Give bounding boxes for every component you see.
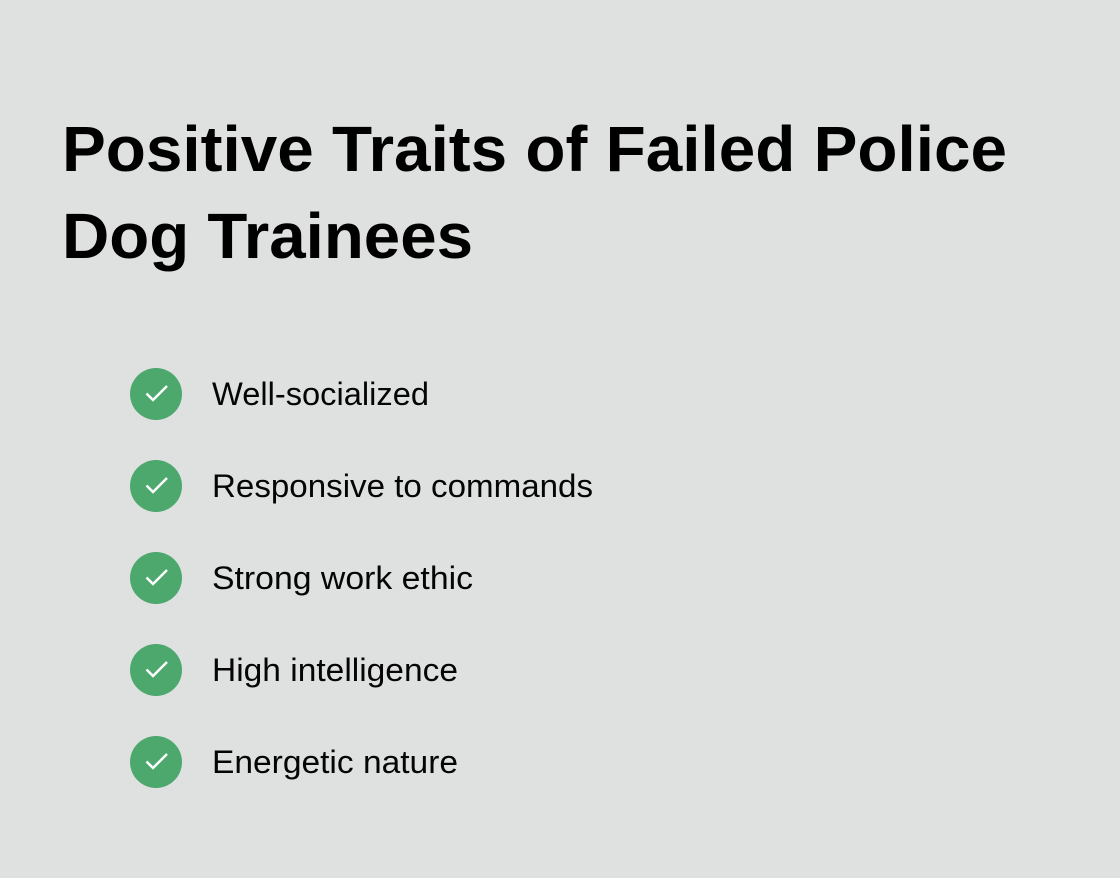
list item: Strong work ethic: Strong work ethic xyxy=(212,560,473,596)
list item: Responsive to commands: Responsive to commands xyxy=(212,468,593,504)
list item: Strong work ethic xyxy=(130,552,473,604)
list item: Well-socialized xyxy=(130,368,429,420)
checklist of traits xyxy=(130,368,593,788)
list item: Energetic nature xyxy=(130,736,458,788)
title xyxy=(62,113,1007,272)
list item: Energetic nature: Energetic nature xyxy=(212,744,458,780)
list item: Well-socialized: Well-socialized xyxy=(212,376,429,412)
title: Dog Trainees xyxy=(62,200,473,272)
list item: Responsive to commands xyxy=(130,460,593,512)
list item: High intelligence: High intelligence xyxy=(212,652,458,688)
list item: High intelligence xyxy=(130,644,458,696)
title: Positive Traits of Failed Police xyxy=(62,113,1007,185)
